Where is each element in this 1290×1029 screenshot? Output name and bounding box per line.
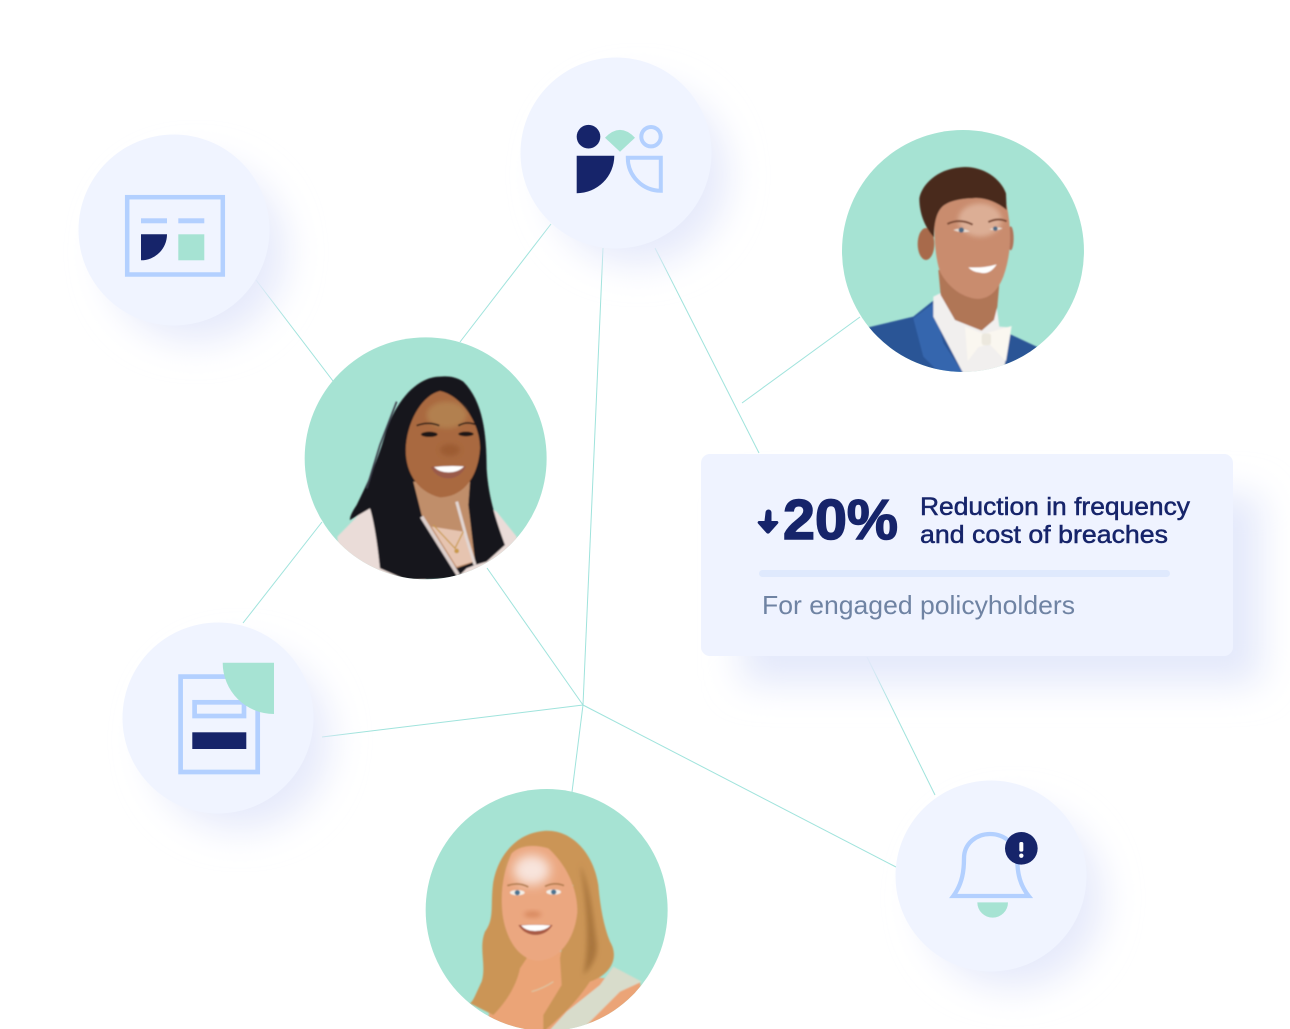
divider bar: [759, 570, 1170, 577]
stat description: and cost of breaches: [920, 521, 1168, 549]
icon node: people: [520, 58, 728, 265]
portrait: woman with long dark hair: [305, 337, 547, 582]
stat card: [701, 454, 1261, 684]
icon: down arrow: [758, 510, 778, 534]
icon node: alert bell: [896, 780, 1103, 988]
icon node: dashboard: [78, 134, 286, 342]
icon: two people with signal: [577, 125, 661, 193]
caption: For engaged policyholders: [762, 590, 1075, 620]
icon: dashboard window: [127, 197, 223, 274]
portrait: woman with blonde hair: [426, 789, 668, 1029]
stat value: 20%: [783, 488, 898, 552]
network connector lines: [243, 224, 935, 867]
icon: document with quarter circle: [181, 663, 274, 772]
icon: bell with alert badge: [953, 832, 1038, 918]
stat description: Reduction in frequency: [920, 493, 1191, 521]
portrait: man in blue suit: [842, 130, 1084, 383]
icon node: document: [122, 622, 330, 830]
